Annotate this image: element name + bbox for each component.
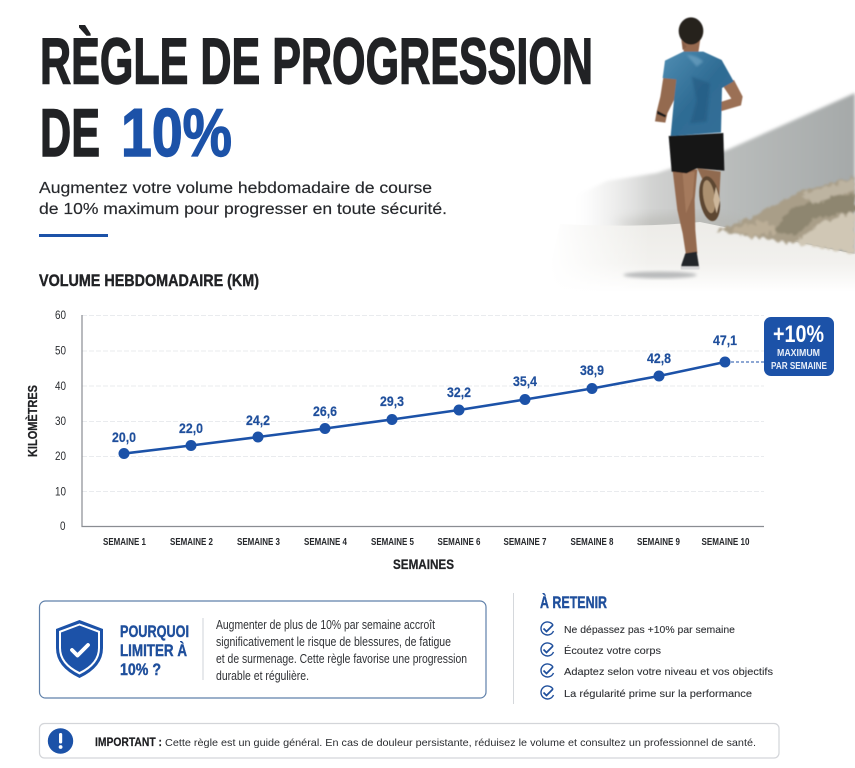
panel: important note [40,724,779,758]
checklist text: Adaptez selon votre niveau et vos objectifs [564,666,773,678]
x axis labels: SEMAINE 1 [103,536,146,548]
x axis labels [103,536,750,548]
data values: 32,2 [447,384,471,400]
y axis title: KILOMÈTRES [25,385,40,457]
data values: 42,8 [647,350,671,366]
x axis labels: SEMAINE 5 [371,536,414,548]
panel heading: 10% ? [120,661,161,679]
data values: 24,2 [246,412,270,428]
shorts [669,133,724,173]
data values: 20,0 [112,429,136,445]
data values: 38,9 [580,362,604,378]
panel body text: Augmenter de plus de 10% par semaine accroît [216,617,435,632]
x axis labels: SEMAINE 9 [637,536,680,548]
data line [124,362,725,454]
checklist text: Écoutez votre corps [564,644,661,657]
note text: IMPORTANT : [95,735,162,749]
y axis labels: 50 [55,346,66,358]
data values: 29,3 [380,393,404,409]
panel: à retenir [540,593,773,700]
photo: runner [623,17,743,278]
standing leg [673,169,697,255]
subtitle: de 10% maximum pour progresser en toute sécurité. [39,201,447,218]
x axis labels: SEMAINE 10 [702,536,750,548]
panel heading [120,623,189,679]
chart heading: VOLUME HEBDOMADAIRE (KM) [39,271,259,290]
arms [655,77,677,123]
panel heading: LIMITER À [120,641,187,660]
checklist icons [541,622,554,699]
note text: Cette règle est un guide général. En cas de douleur persistante, réduisez le volume et consultez un professionnel de santé. [165,737,756,749]
panel heading: À RETENIR [540,593,607,612]
icon: exclamation [48,728,73,754]
title: DE [40,95,100,171]
y axis labels: 60 [55,310,66,322]
raised leg [697,168,721,197]
panel body text: durable et régulière. [216,668,309,683]
callout: +10% badge: +10% [773,321,824,348]
data values: 47,1 [713,332,737,348]
y axis labels [55,310,66,533]
panel body text: et de surmenage. Cette règle favorise une progression [216,651,467,666]
shirt [663,52,734,136]
accent rule [39,234,108,237]
title: RÈGLE DE PROGRESSION [40,24,593,98]
title [40,24,593,171]
x axis labels: SEMAINE 3 [237,536,280,548]
x axis labels: SEMAINE 7 [504,536,547,548]
callout: +10% badge [764,317,834,376]
y axis labels: 30 [55,416,66,428]
panel: pourquoi limiter [40,601,486,698]
x axis labels: SEMAINE 6 [438,536,481,548]
panel body text [216,617,467,683]
photo: landscape behind runner [545,93,855,295]
checklist text: Ne dépassez pas +10% par semaine [564,624,735,636]
grass bushes [716,177,855,254]
x axis labels: SEMAINE 2 [170,536,213,548]
panel heading: POURQUOI [120,623,189,641]
icon: shield [56,620,103,678]
x axis labels: SEMAINE 4 [304,536,347,548]
target dashed line [731,361,764,363]
data values: 22,0 [179,420,203,436]
data values: 26,6 [313,403,337,419]
panel body text: significativement le risque de blessures, de fatigue [216,634,451,649]
title: 10% [121,95,232,171]
checklist text [564,624,773,700]
x axis title: SEMAINES [393,556,454,572]
line chart [25,310,764,572]
data points [118,356,730,459]
data values: 35,4 [513,373,537,389]
neck and head [683,37,701,55]
y axis labels: 10 [55,486,66,498]
subtitle [39,180,447,218]
x axis labels: SEMAINE 8 [570,536,614,548]
y axis labels: 40 [55,381,66,393]
y axis labels: 0 [60,521,66,533]
subtitle: Augmentez votre volume hebdomadaire de course [39,180,432,197]
callout: +10% badge: MAXIMUM [777,347,820,359]
y axis labels: 20 [55,451,66,463]
checklist text: La régularité prime sur la performance [564,688,752,700]
callout: +10% badge: PAR SEMAINE [771,360,827,372]
data values [112,332,737,445]
